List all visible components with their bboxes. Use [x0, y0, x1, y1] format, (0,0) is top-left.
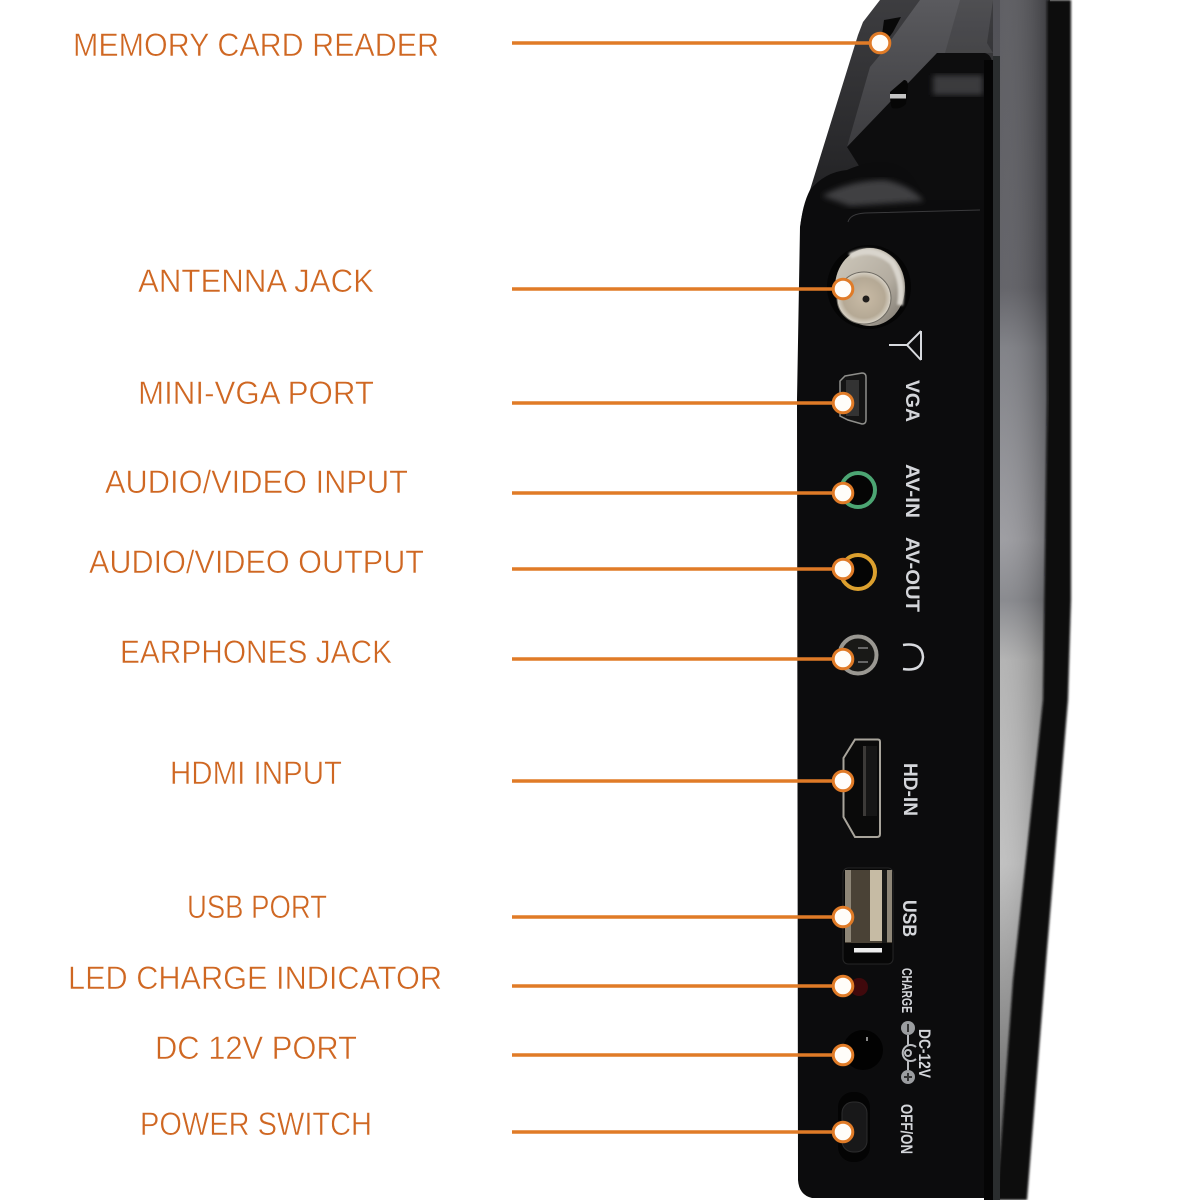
label: USB: USB: [898, 900, 919, 937]
callout: HDMI input: [170, 755, 853, 791]
callout: memory card reader: [73, 27, 890, 63]
label: DC-12V: DC-12V: [915, 1029, 934, 1079]
icon: mini-VGA port: [840, 373, 866, 424]
side panel: [797, 162, 993, 1198]
icon: headphone symbol: [903, 644, 923, 670]
callout: power switch: POWER SWITCH: [140, 1106, 372, 1142]
rear block: [847, 53, 993, 230]
label: AV-IN: AV-IN: [901, 464, 922, 518]
callout: earphones jack: [120, 634, 853, 670]
callout: earphones jack: EARPHONES JACK: [120, 634, 392, 670]
label: HD-IN: HD-IN: [899, 763, 920, 816]
label: AV-OUT: AV-OUT: [901, 537, 922, 612]
screen edge: [990, 0, 1050, 1200]
callout: power switch: [140, 1106, 853, 1142]
icon: HDMI port: [844, 740, 880, 837]
callout: memory card reader: MEMORY CARD READER: [73, 27, 439, 63]
callout: mini-VGA port: [138, 375, 853, 413]
upper housing silhouette: [800, 0, 993, 230]
icon: DC 12V port: [843, 1030, 883, 1070]
device: portable TV side view: [797, 0, 1071, 1200]
callout: antenna jack: [138, 263, 853, 299]
icon: LED indicator: [850, 978, 868, 996]
label: VGA: VGA: [901, 380, 922, 422]
callout: LED charge indicator: LED CHARGE INDICATOR: [68, 960, 442, 996]
icon: antenna jack connector: [827, 245, 911, 329]
callout: USB port: USB PORT: [187, 889, 327, 925]
callout: DC 12V port: [155, 1030, 853, 1066]
callout: USB port: [187, 889, 853, 927]
icon: antenna symbol: [889, 331, 921, 360]
icon: AV-in jack: [841, 473, 875, 507]
callout: audio/video input: AUDIO/VIDEO INPUT: [105, 464, 408, 500]
callout: audio/video output: AUDIO/VIDEO OUTPUT: [89, 544, 424, 580]
callout: HDMI input: HDMI INPUT: [170, 755, 342, 791]
label: OFF/ON: OFF/ON: [897, 1104, 915, 1154]
memory slot: [880, 17, 901, 50]
lighter top wedge: [847, 0, 993, 147]
icon: power switch: [838, 1092, 870, 1162]
callout: audio/video input: [105, 464, 853, 503]
icon: DC polarity symbol: [901, 1021, 916, 1084]
vent slot: [890, 80, 908, 108]
icon: AV-out jack: [841, 555, 875, 589]
label: CHARGE: CHARGE: [898, 968, 915, 1013]
callout: DC 12V port: DC 12V PORT: [155, 1030, 357, 1066]
bezel edge: [997, 0, 1071, 1200]
callout: antenna jack: ANTENNA JACK: [138, 263, 374, 299]
icon: USB port: [843, 868, 893, 964]
callout: mini-VGA port: MINI-VGA PORT: [138, 375, 374, 411]
callout: LED charge indicator: [68, 960, 853, 996]
hump highlight: [822, 180, 924, 206]
callout: audio/video output: [89, 544, 853, 580]
icon: earphones jack: [840, 636, 876, 674]
